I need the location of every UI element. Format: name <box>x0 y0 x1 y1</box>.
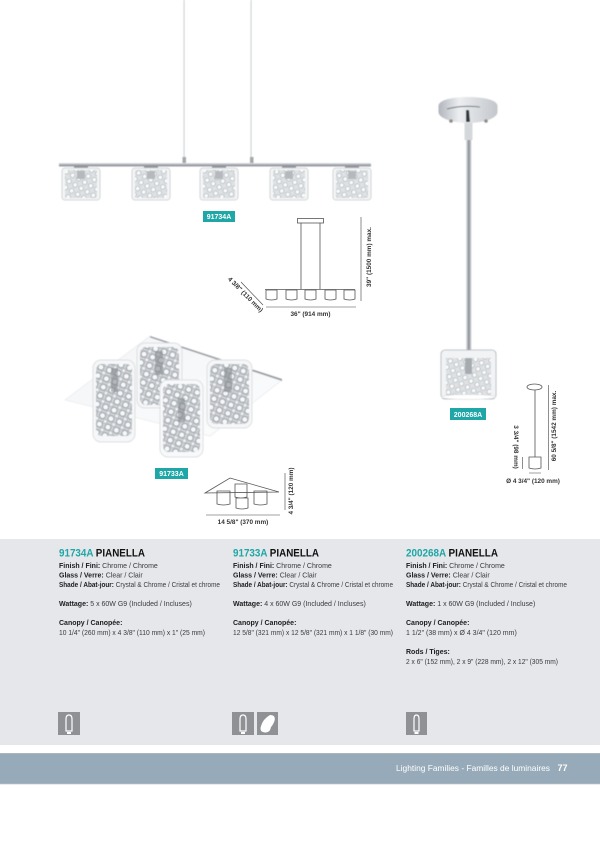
dimension diagram: 200268A <box>506 384 560 485</box>
column: 200268A specifications: Glass / Verre: Clear / Clair <box>406 572 490 580</box>
column: 91734A specifications <box>59 548 220 637</box>
dimension diagram: 200268A: 60 5/8" (1542 mm) max. <box>551 391 558 461</box>
footer band: Lighting Families - Familles de luminaires <box>396 763 550 773</box>
column: 91733A specifications: Glass / Verre: Clear / Clair <box>233 572 317 580</box>
column: 91733A specifications <box>233 548 393 637</box>
dimension diagram: 91734A: 4 3/8" (110 mm) <box>226 276 264 314</box>
column: 200268A specifications <box>406 548 567 666</box>
column: 91734A specifications: Canopy / Canopée: <box>59 620 122 627</box>
column: 91734A specifications: Finish / Fini: Chrome / Chrome <box>59 563 158 570</box>
column: 200268A specifications: Wattage: 1 x 60W G9 (Included / Incluse) <box>406 601 535 608</box>
column: 200268A specifications: Rods / Tiges: <box>406 649 450 656</box>
column: 200268A specifications: 1 1/2" (38 mm) x Ø 4 3/4" (120 mm) <box>406 630 517 637</box>
column: 91733A specifications: 91733A PIANELLA <box>233 548 319 560</box>
column: 91733A specifications: 12 5/8" (321 mm) x 12 5/8" (321 mm) x 1 1/8" (30 mm) <box>233 630 393 637</box>
dimension diagram: 91734A <box>226 217 373 318</box>
dimension diagram: 91733A: 4 3/4" (120 mm) <box>288 467 295 515</box>
icon: G9 bulb, 91733A <box>232 712 254 735</box>
dimension diagram: 91733A: 14 5/8" (370 mm) <box>218 519 268 526</box>
dimension diagram: 91734A: 36" (914 mm) <box>291 311 330 318</box>
column: 91733A specifications: Shade / Abat-jour: Crystal & Chrome / Cristal et chrome <box>233 582 393 589</box>
column: 91733A specifications: Wattage: 4 x 60W G9 (Included / Incluses) <box>233 601 366 608</box>
label: 200268A: 200268A <box>454 412 482 419</box>
label: 200268A <box>450 408 486 420</box>
column: 200268A specifications: Finish / Fini: Chrome / Chrome <box>406 563 505 570</box>
column: 200268A specifications: 2 x 6" (152 mm), 2 x 9" (228 mm), 2 x 12" (305 mm) <box>406 659 558 666</box>
icon: crystal shape, 91733A <box>257 712 278 735</box>
column: 91734A specifications: Glass / Verre: Clear / Clair <box>59 572 143 580</box>
column: 91734A specifications: 10 1/4" (260 mm) x 4 3/8" (110 mm) x 1" (25 mm) <box>59 630 205 637</box>
column: 91733A specifications: Canopy / Canopée: <box>233 620 296 627</box>
column: 91733A specifications: Finish / Fini: Chrome / Chrome <box>233 563 332 570</box>
label: 91733A: 91733A <box>159 471 184 478</box>
column: 200268A specifications: Shade / Abat-jour: Crystal & Chrome / Cristal et chrome <box>406 582 567 589</box>
product photo: 91733A square ceiling lamp <box>65 336 282 457</box>
dimension diagram: 200268A: Ø 4 3/4" (120 mm) <box>506 478 560 485</box>
icon: G9 bulb, 200268A <box>406 712 427 735</box>
dimension diagram: 91733A <box>205 467 295 526</box>
column: 91734A specifications: Shade / Abat-jour: Crystal & Chrome / Cristal et chrome <box>59 582 220 589</box>
label: 91734A <box>203 211 235 222</box>
label: 91733A <box>155 468 188 479</box>
column: 200268A specifications: 200268A PIANELLA <box>406 548 498 560</box>
column: 91734A specifications: 91734A PIANELLA <box>59 548 145 560</box>
footer band <box>0 753 600 784</box>
icon: G9 bulb, 91734A <box>58 712 80 735</box>
dimension diagram: 91734A: 39" (1500 mm) max. <box>366 227 373 287</box>
product photo: 91734A linear pendant <box>59 0 371 200</box>
column: 91734A specifications: Wattage: 5 x 60W G9 (Included / Incluses) <box>59 601 192 608</box>
column: 200268A specifications: Canopy / Canopée: <box>406 620 469 627</box>
label: 91734A: 91734A <box>207 214 231 221</box>
product photo: 200268A pendant <box>438 97 498 400</box>
footer band: 77 <box>558 763 568 773</box>
panel: specifications background <box>0 539 600 745</box>
dimension diagram: 200268A: 3 3/4" (98 mm) <box>512 425 519 469</box>
